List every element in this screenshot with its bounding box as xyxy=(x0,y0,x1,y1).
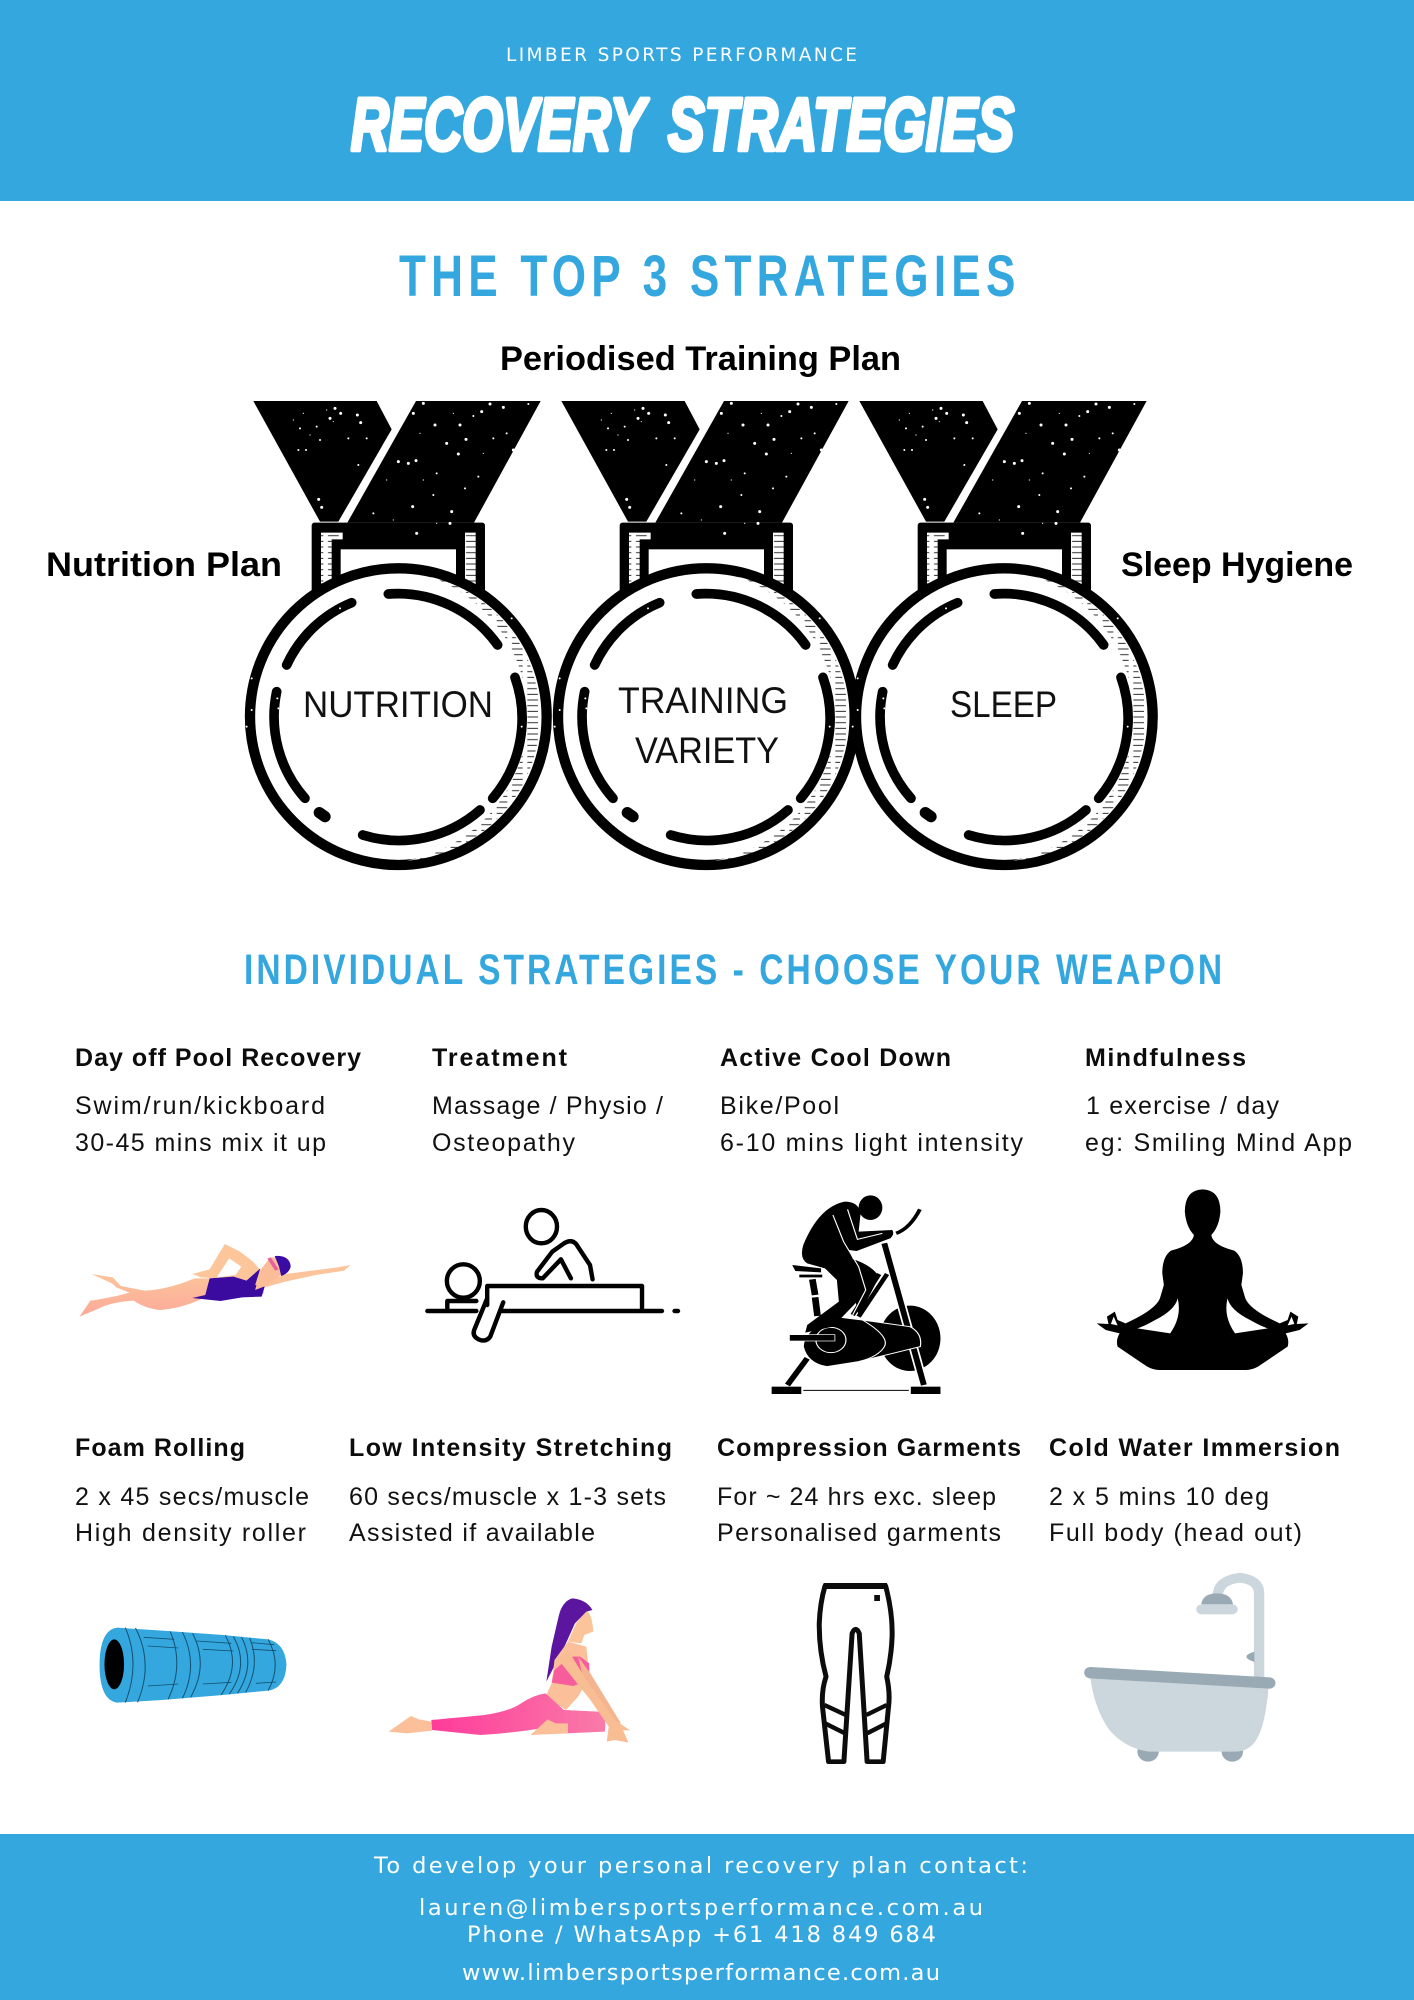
strategy text: mindfulness: 1 exercise / day xyxy=(1086,1092,1280,1120)
strategy text: cold water immersion: Cold Water Immersion xyxy=(1049,1434,1340,1462)
strategy text: compression garments: Compression Garments xyxy=(717,1434,1021,1462)
title: RECOVERY xyxy=(351,83,649,166)
strategy text: low intensity stretching: Assisted if available xyxy=(349,1519,595,1547)
strategy text: compression garments xyxy=(717,1434,1021,1547)
strategy text: treatment xyxy=(432,1044,663,1157)
strategy text: compression garments: Personalised garments xyxy=(717,1519,1001,1547)
strategy text: cold water immersion: 2 x 5 mins 10 deg xyxy=(1049,1483,1269,1511)
strategy text: low intensity stretching: 60 secs/muscle x 1-3 sets xyxy=(349,1483,666,1511)
strategy text: foam rolling: 2 x 45 secs/muscle xyxy=(75,1483,309,1511)
strategy text: mindfulness xyxy=(1085,1044,1352,1157)
strategy text: treatment: Osteopathy xyxy=(432,1129,576,1157)
title xyxy=(351,83,1014,166)
contact prompt: To develop your personal recovery plan contact: xyxy=(373,1853,1028,1879)
heading: the top 3 strategies: THE TOP 3 STRATEGIES xyxy=(399,243,1015,308)
medal text: nutrition: NUTRITION xyxy=(303,684,493,725)
strategy text: treatment: Treatment xyxy=(432,1044,568,1072)
icon: exercise bike xyxy=(772,1195,940,1394)
medal: nutrition xyxy=(247,401,547,865)
icon: stretching woman xyxy=(388,1598,630,1743)
strategy text: day off pool recovery: 30-45 mins mix it up xyxy=(75,1129,326,1157)
header band xyxy=(0,0,1414,201)
brand name: LIMBER SPORTS PERFORMANCE xyxy=(506,45,857,66)
label: periodised training plan: Periodised Training Plan xyxy=(500,340,901,378)
email: lauren@limbersportsperformance.com.au xyxy=(419,1895,983,1921)
strategy text: active cool down: Bike/Pool xyxy=(720,1092,839,1120)
medal text: training variety xyxy=(618,680,788,771)
icon: treatment table xyxy=(427,1210,678,1341)
strategy text: day off pool recovery: Day off Pool Recovery xyxy=(75,1044,361,1072)
medal text: training variety: VARIETY xyxy=(635,730,779,771)
website: www.limbersportsperformance.com.au xyxy=(462,1960,940,1986)
strategy text: foam rolling: High density roller xyxy=(75,1519,306,1547)
strategy text: mindfulness: Mindfulness xyxy=(1085,1044,1246,1072)
medal: training variety xyxy=(555,401,855,865)
strategy text: active cool down xyxy=(720,1044,1024,1157)
heading: individual strategies: INDIVIDUAL STRATEGIES - CHOOSE YOUR WEAPON xyxy=(244,946,1222,994)
strategy text: low intensity stretching: Low Intensity Stretching xyxy=(349,1434,672,1462)
medal: sleep xyxy=(853,401,1153,865)
icon: swimmer xyxy=(80,1244,351,1317)
strategy text: treatment: Massage / Physio / xyxy=(432,1092,663,1120)
title: STRATEGIES xyxy=(668,83,1014,166)
medal text: sleep: SLEEP xyxy=(950,684,1057,725)
medal text: training variety: TRAINING xyxy=(618,680,788,721)
strategy text: foam rolling xyxy=(75,1434,309,1547)
strategy text: foam rolling: Foam Rolling xyxy=(75,1434,245,1462)
icon: bathtub with shower xyxy=(1090,1578,1269,1762)
strategy text: compression garments: For ~ 24 hrs exc. sleep xyxy=(717,1483,996,1511)
phone: Phone / WhatsApp +61 418 849 684 xyxy=(467,1922,936,1948)
strategy text: cold water immersion xyxy=(1049,1434,1340,1547)
strategy text: active cool down: Active Cool Down xyxy=(720,1044,951,1072)
strategy text: cold water immersion: Full body (head out) xyxy=(1049,1519,1302,1547)
icon: compression leggings xyxy=(819,1586,892,1762)
icon: meditation silhouette xyxy=(1097,1189,1309,1370)
strategy text: low intensity stretching xyxy=(349,1434,672,1547)
strategy text: active cool down: 6-10 mins light intensity xyxy=(720,1129,1024,1157)
strategy text: day off pool recovery xyxy=(75,1044,361,1157)
strategy text: mindfulness: eg: Smiling Mind App xyxy=(1085,1129,1352,1157)
label: nutrition plan: Nutrition Plan xyxy=(46,546,282,584)
icon: foam roller xyxy=(100,1628,286,1703)
label: sleep hygiene: Sleep Hygiene xyxy=(1121,546,1353,584)
strategy text: day off pool recovery: Swim/run/kickboard xyxy=(75,1092,325,1120)
footer band xyxy=(0,1834,1414,2000)
